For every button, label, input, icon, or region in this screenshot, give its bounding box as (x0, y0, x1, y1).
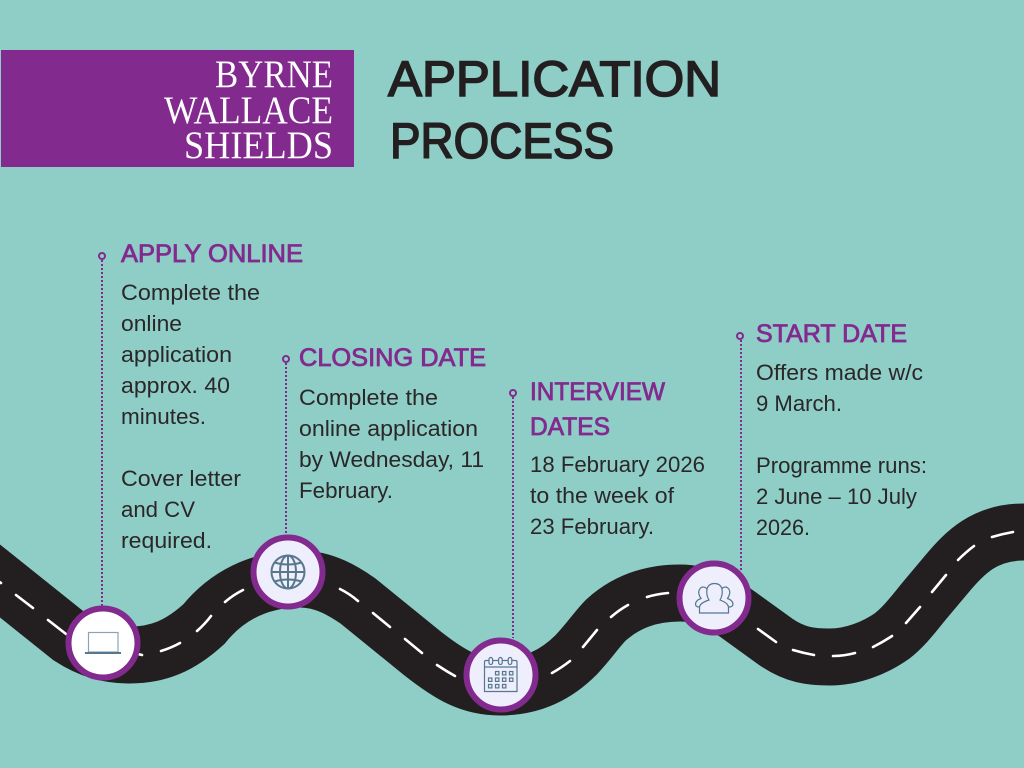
text: closing date details (299, 385, 484, 503)
text: closing date details: Complete the (299, 385, 438, 410)
text: interview dates details (530, 452, 705, 539)
text: interview dates details: to the week of (530, 483, 675, 508)
text: apply online details: online (121, 311, 182, 336)
text: closing date details: by Wednesday, 11 (299, 447, 484, 472)
text: closing date details: February. (299, 478, 393, 503)
road centre dashes (0, 532, 1013, 676)
icon: calendar (466, 640, 536, 710)
icon: laptop (68, 608, 138, 678)
heading: apply online: APPLY ONLINE (121, 240, 303, 268)
text: closing date details: online application (299, 416, 478, 441)
text: apply online details: approx. 40 (121, 373, 230, 398)
text: apply online details: Complete the (121, 280, 260, 305)
heading: interview dates (530, 378, 665, 441)
title (388, 51, 721, 169)
heading: closing date: CLOSING DATE (299, 344, 486, 372)
title: APPLICATION (388, 51, 721, 107)
step 1: apply online (68, 240, 303, 678)
text: apply online details: minutes. (121, 404, 206, 429)
connector: apply online (99, 253, 105, 606)
panel: logo: SHIELDS (184, 124, 333, 167)
connector: interview dates (510, 390, 516, 638)
panel: logo: WALLACE (164, 89, 333, 132)
text: interview dates details: 23 February. (530, 514, 654, 539)
text: interview dates details: 18 February 2026 (530, 452, 705, 477)
text: apply online details: and CV (121, 497, 195, 522)
road (0, 532, 1024, 687)
text: start date details: 2 June – 10 July (756, 484, 918, 509)
step 2: closing date (254, 344, 486, 606)
step 3: interview dates (466, 378, 705, 710)
text: apply online details: application (121, 342, 232, 367)
icon: people (680, 564, 748, 632)
text: apply online details: required. (121, 528, 212, 553)
text: apply online details (121, 280, 260, 553)
panel: logo: BYRNE (215, 53, 333, 96)
step 4: start date (680, 320, 927, 632)
text: start date details: 9 March. (756, 391, 842, 416)
text: start date details: 2026. (756, 515, 810, 540)
heading: interview dates: INTERVIEW (530, 378, 665, 406)
connector: closing date (283, 356, 289, 535)
text: start date details (756, 360, 927, 540)
connector: start date (737, 333, 743, 571)
text: apply online details: Cover letter (121, 466, 242, 491)
panel: logo (1, 50, 354, 167)
text: start date details: Offers made w/c (756, 360, 923, 385)
text: start date details: Programme runs: (756, 453, 927, 478)
title: PROCESS (390, 113, 614, 169)
icon: globe (254, 538, 322, 606)
heading: start date: START DATE (756, 320, 907, 348)
heading: interview dates: DATES (530, 413, 610, 441)
